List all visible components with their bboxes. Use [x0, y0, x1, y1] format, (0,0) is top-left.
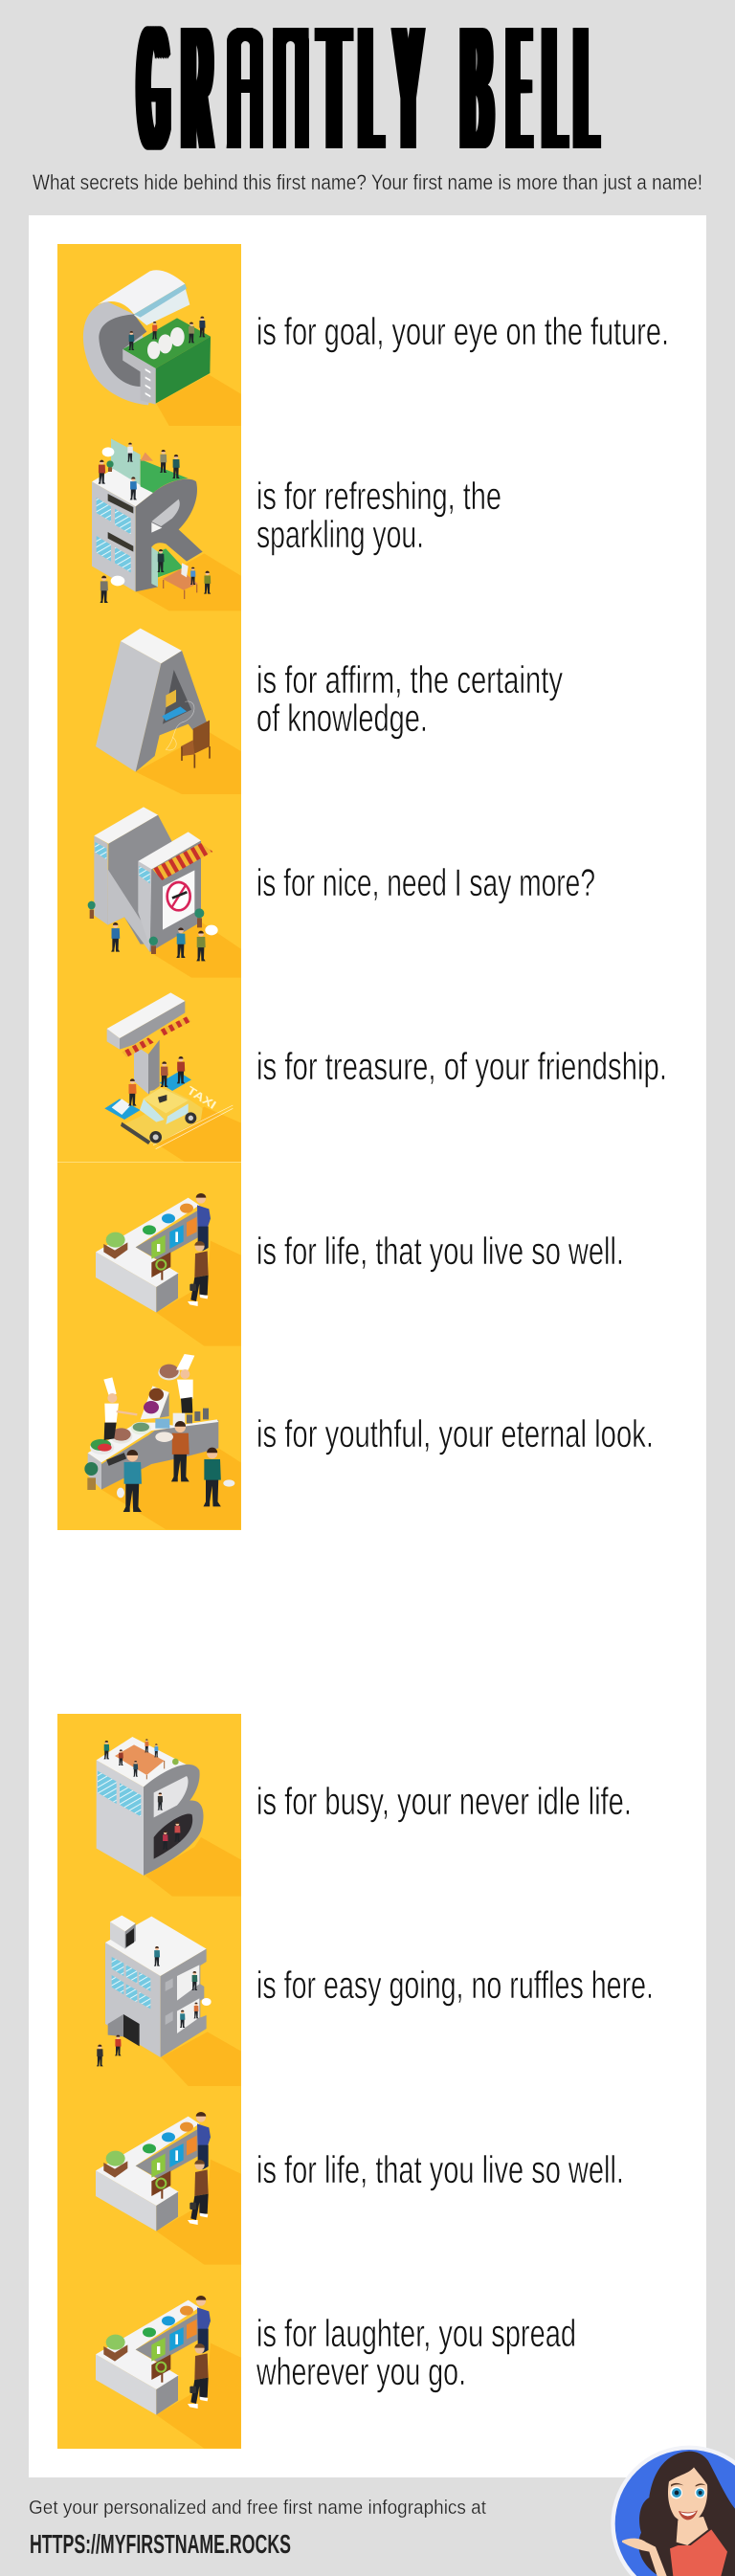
- icon: isometric letter R: [92, 438, 241, 611]
- icon: isometric letter L with recycling station: [96, 2112, 241, 2265]
- row text: R: [256, 476, 501, 556]
- footer url: HTTPS://MYFIRSTNAME.ROCKS: [30, 2529, 291, 2559]
- row text: L: is for laughter, you spread: [256, 2313, 576, 2355]
- footer text: Get your personalized and free first name infographics at: [29, 2498, 486, 2519]
- row text: A: is for affirm, the certainty: [256, 659, 563, 701]
- icon: isometric letter L with recycling station: [96, 2296, 241, 2449]
- row text: L: wherever you go.: [256, 2351, 466, 2393]
- icon: isometric letter T with taxi: [104, 992, 241, 1162]
- panel: yellow strip, first name: [57, 244, 241, 1530]
- icon: isometric letter A: [96, 629, 241, 794]
- row text: A: [256, 659, 563, 740]
- icon: isometric letter E: [97, 1916, 241, 2086]
- row text: N: is for nice, need I say more?: [256, 862, 595, 904]
- icon: isometric letter L with recycling station: [96, 1193, 241, 1346]
- icon: avatar woman in blue circle: [611, 2446, 735, 2576]
- divider line between rows: [57, 1162, 241, 1163]
- row text: R: is for refreshing, the: [256, 476, 501, 518]
- row text: R: sparkling you.: [256, 514, 424, 556]
- icon: isometric letter N: [88, 807, 241, 978]
- icon: isometric letter B: [97, 1737, 241, 1897]
- icon: isometric letter G: [83, 270, 241, 426]
- icon: isometric letter T with taxi: TAXI: [185, 1083, 218, 1112]
- icon: buffet counter forming letter Y: [84, 1354, 241, 1529]
- row text: L: [256, 2313, 576, 2393]
- title: [135, 0, 601, 186]
- panel: yellow strip, last name: [57, 1714, 241, 2449]
- row text: A: of knowledge.: [256, 698, 428, 740]
